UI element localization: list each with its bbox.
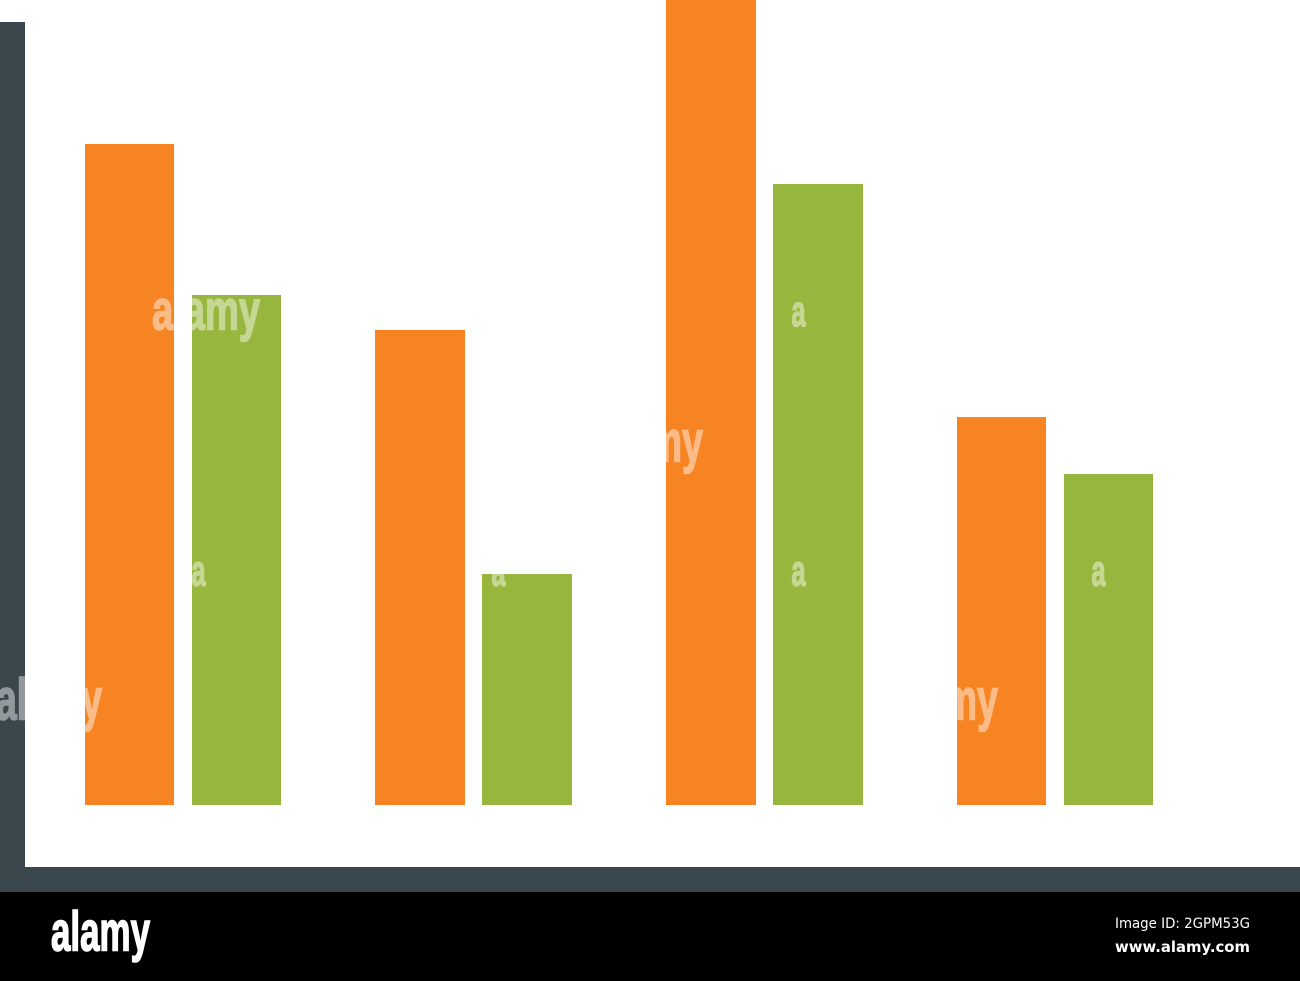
watermarks: a [192, 546, 206, 596]
watermarks: a [792, 546, 806, 596]
website: www.alamy.com [1115, 938, 1250, 956]
watermarks [0, 278, 1106, 732]
bar group 2 [375, 330, 572, 805]
y axis [0, 22, 25, 892]
watermarks: alamy [891, 668, 998, 732]
bar group 1 [85, 144, 281, 805]
watermarks: alamy [596, 410, 703, 474]
bar group 3 [666, 0, 863, 805]
bar group 4 [957, 417, 1153, 805]
footer band [0, 892, 1300, 981]
watermarks: a [1092, 546, 1106, 596]
watermarks: a [492, 546, 506, 596]
image id: Image ID: 2GPM53G [1115, 916, 1250, 932]
x axis [0, 867, 1300, 892]
alamy logo: alamy [51, 900, 150, 962]
watermarks: a [792, 287, 806, 336]
watermarks: alamy [152, 278, 260, 342]
watermarks: alamy [0, 668, 102, 732]
